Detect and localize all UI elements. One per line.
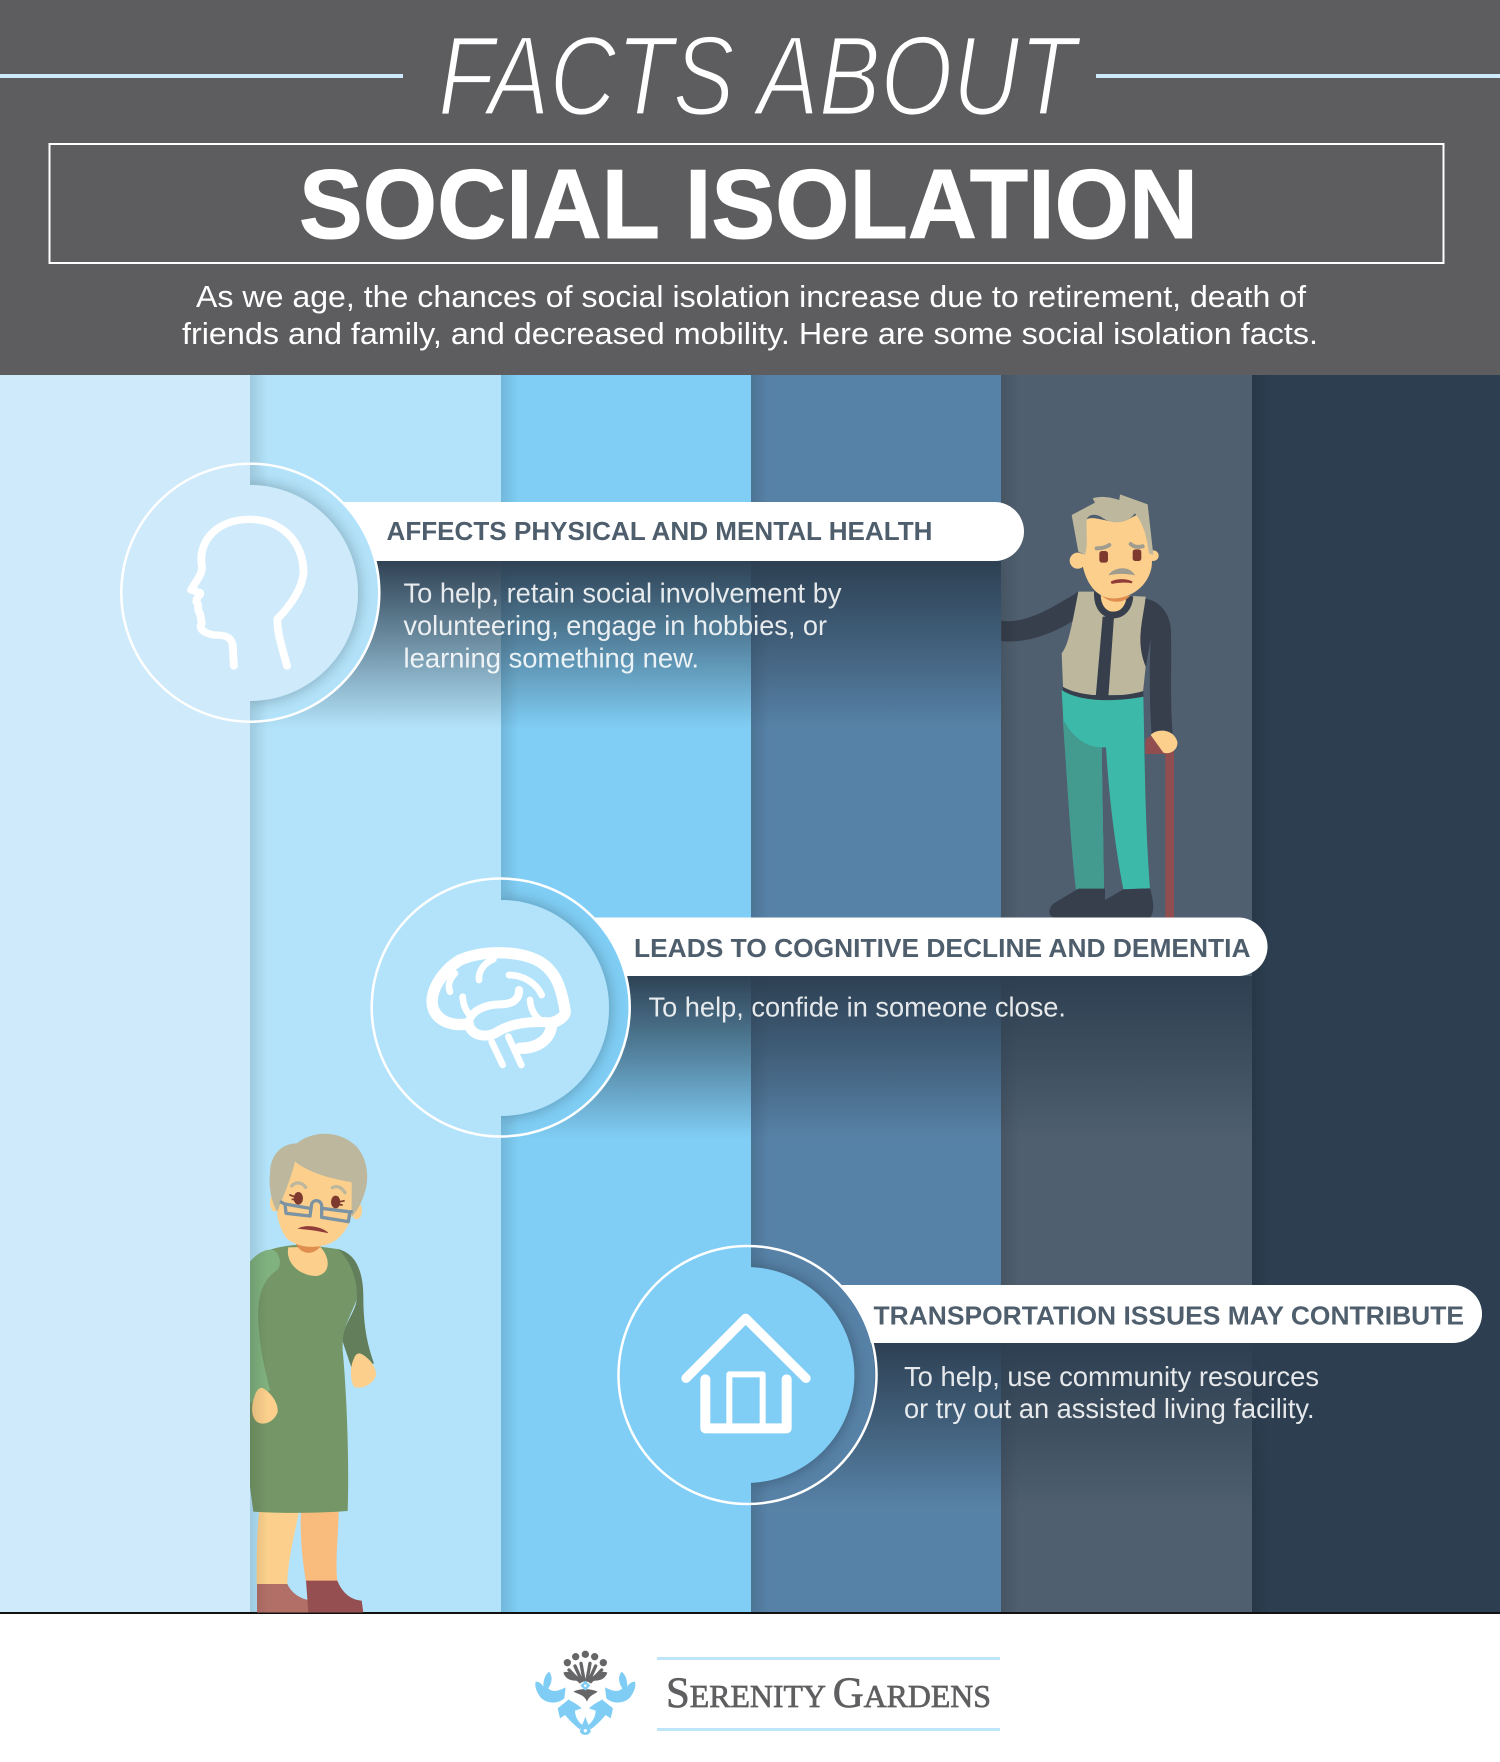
fact 1 panel [121, 464, 1024, 729]
fact 1 body text: volunteering, engage in hobbies, or [404, 610, 827, 641]
fact 3 body text [904, 1361, 1319, 1424]
fact 3 circle [618, 1246, 876, 1504]
fact 2 heading pill [504, 918, 1268, 976]
fact 2 heading pill: LEADS TO COGNITIVE DECLINE AND DEMENTIA [634, 933, 1251, 963]
illustration: older man with cane [1000, 494, 1177, 918]
fact 3 heading pill: TRANSPORTATION ISSUES MAY CONTRIBUTE [874, 1300, 1464, 1330]
fact 2 panel [372, 878, 1268, 1139]
title: facts about: FACTS ABOUT [438, 13, 1082, 139]
fact 3 body text: To help, use community resources [904, 1361, 1319, 1392]
icon: house [686, 1318, 806, 1428]
column stripes [0, 375, 1500, 1614]
fact 1 circle [121, 464, 379, 722]
fact 3 panel [618, 1246, 1500, 1508]
intro text: friends and family, and decreased mobility. Here are some social isolation facts. [182, 316, 1318, 351]
fact 2 circle [372, 878, 630, 1136]
intro text [182, 279, 1318, 351]
icon: head profile [191, 519, 304, 666]
fact 1 body text [404, 578, 842, 674]
logo wordmark: SERENITY GARDENS [666, 1670, 991, 1717]
fact 3 heading pill [754, 1285, 1482, 1343]
illustration: older woman with glasses [250, 1134, 376, 1613]
fact 3 body text: or try out an assisted living facility. [904, 1393, 1314, 1424]
intro text: As we age, the chances of social isolation increase due to retirement, death of [196, 279, 1306, 314]
fact 2 body text: To help, confide in someone close. [648, 992, 1066, 1022]
fact 1 heading pill: AFFECTS PHYSICAL AND MENTAL HEALTH [386, 516, 932, 546]
logo ornament [535, 1651, 635, 1735]
column edge shadows [250, 375, 1270, 1612]
fact 1 heading pill [253, 502, 1024, 561]
icon: brain [432, 953, 565, 1065]
fact 1 body text: To help, retain social involvement by [404, 578, 842, 608]
fact 1 body text: learning something new. [404, 642, 699, 674]
header panel [0, 0, 1500, 375]
title: social isolation: SOCIAL ISOLATION [299, 149, 1198, 259]
logo: serenity gardens [535, 1651, 1000, 1735]
